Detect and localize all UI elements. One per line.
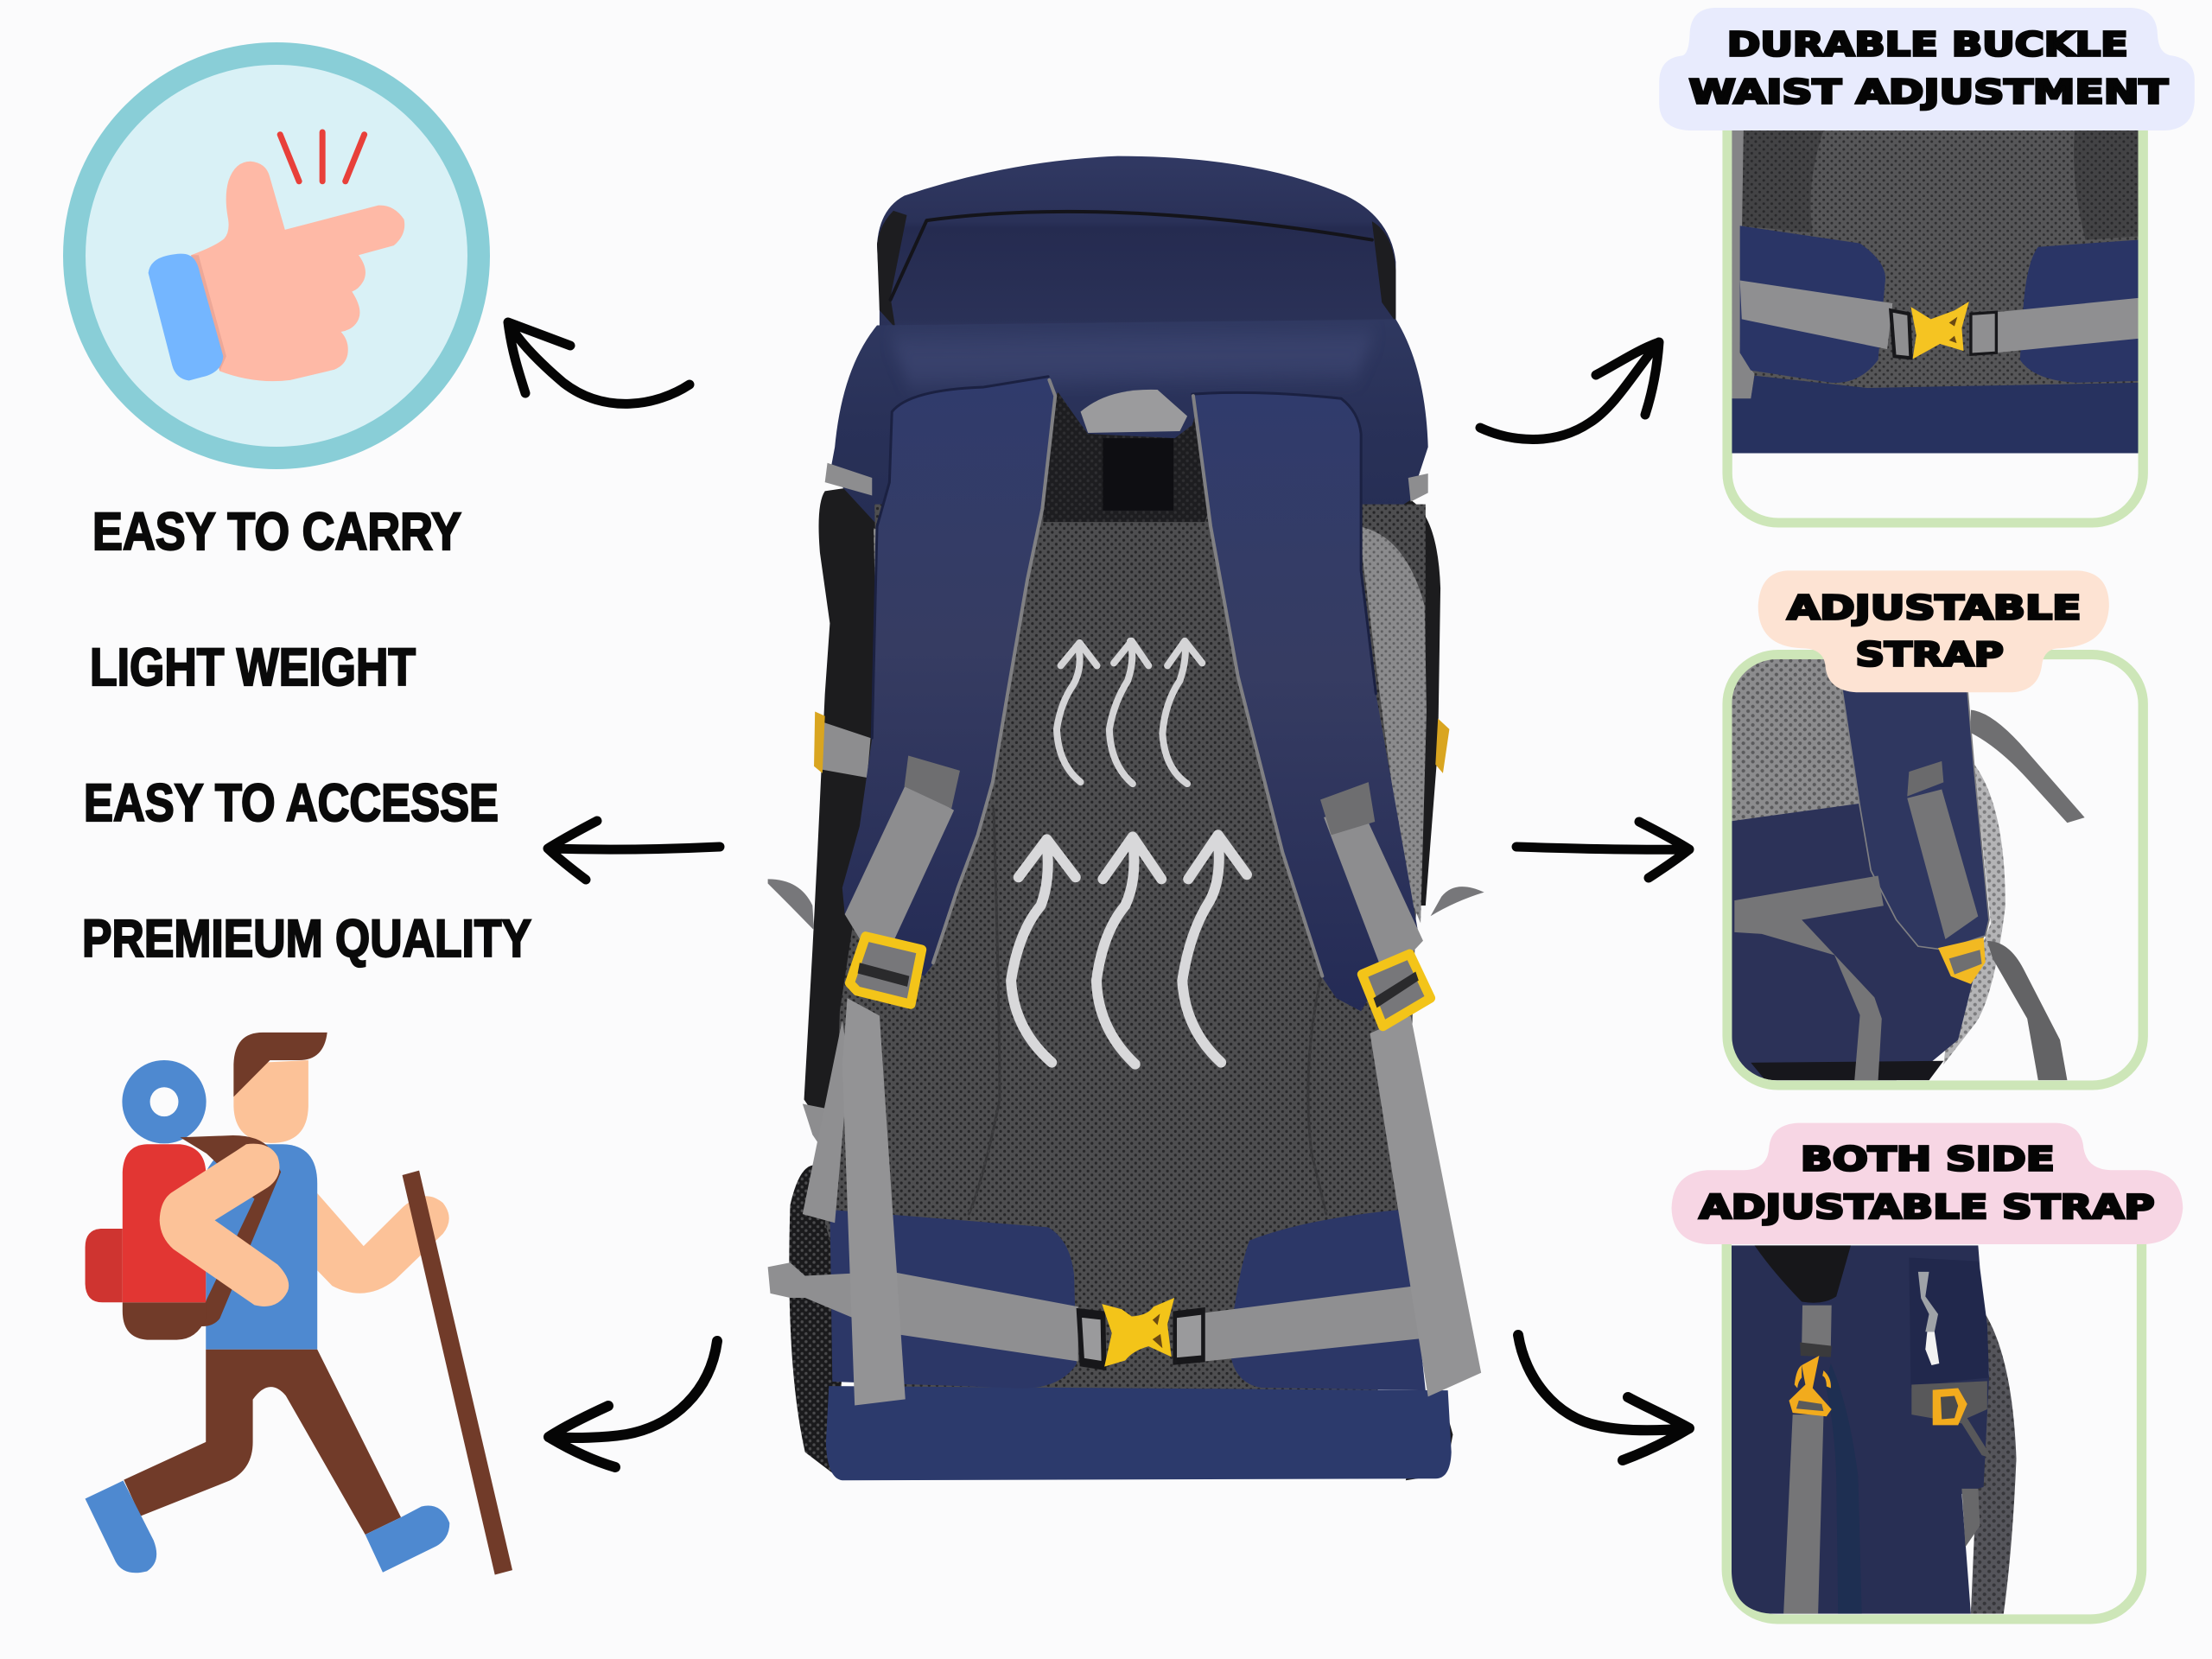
torso bbox=[206, 1144, 317, 1350]
top handle bbox=[1081, 390, 1187, 433]
right strap tab bbox=[1320, 782, 1375, 835]
label: easy to accesse: EASY TO ACCESSE bbox=[84, 773, 499, 832]
left vertical strap upper bbox=[845, 782, 954, 971]
handle loop bbox=[1103, 438, 1173, 511]
left buckle slider bbox=[1079, 1313, 1104, 1366]
right bottom corner bbox=[1406, 1399, 1452, 1480]
upper body bbox=[830, 319, 1428, 522]
left strap outer edge bbox=[872, 377, 1048, 738]
lid bbox=[877, 156, 1395, 328]
arrow: to hand icon bbox=[508, 322, 690, 404]
right vertical strap upper bbox=[1324, 809, 1423, 981]
label: premieum quality: PREMIEUM QUALITY bbox=[82, 909, 531, 968]
panel frame bbox=[1726, 1194, 2142, 1619]
icon: hiker with backpack bbox=[86, 1033, 512, 1574]
badge background bbox=[1672, 1123, 2183, 1244]
right strap piping bbox=[1193, 396, 1322, 976]
left black side bbox=[804, 482, 885, 1130]
left strap tab bbox=[905, 755, 960, 809]
right strap outer edge bbox=[1192, 392, 1376, 694]
right shoulder strap bbox=[1192, 392, 1418, 1011]
main backpack photo bbox=[768, 156, 1484, 1480]
icon: pointing hand in a circle bbox=[74, 54, 479, 458]
lighter fold on upper body bbox=[889, 333, 1376, 385]
arrow: to adjustable strap panel bbox=[1516, 822, 1689, 878]
badge background bbox=[1659, 8, 2195, 130]
icon circle bbox=[74, 54, 479, 458]
photo: front view strap bbox=[1732, 1245, 2017, 1614]
side wings bbox=[768, 879, 1484, 931]
bedroll bbox=[122, 1060, 207, 1143]
waist buckle bbox=[1102, 1298, 1174, 1367]
arrow: to hiker bbox=[549, 1341, 717, 1467]
hair bbox=[233, 1033, 327, 1096]
panel frame bbox=[1727, 71, 2143, 523]
label: light weight: LIGHT WEIGHT bbox=[90, 638, 416, 696]
back shoe bbox=[86, 1481, 156, 1573]
body bottom bbox=[826, 1386, 1452, 1480]
lumbar seams bbox=[969, 809, 1326, 1214]
bag pocket bbox=[86, 1229, 123, 1302]
photo: waist buckle closeup bbox=[1732, 130, 2139, 454]
near arm bbox=[160, 1144, 289, 1306]
badge text line 1: DURABLE BUCKLE bbox=[1727, 26, 2128, 64]
left shoulder strap bbox=[842, 377, 1057, 976]
panel: adjustable strap bbox=[1727, 570, 2143, 1085]
left waist strap bbox=[768, 1262, 1078, 1361]
badge text line 2: STRAP bbox=[1855, 636, 2004, 674]
airflow arrows top row bbox=[1057, 641, 1202, 784]
lid black edges bbox=[877, 211, 1395, 328]
right vertical strap lower bbox=[1370, 1016, 1481, 1396]
right light mesh bbox=[1358, 526, 1427, 923]
hand drawing bbox=[149, 132, 404, 381]
far arm bbox=[317, 1193, 449, 1294]
lid zip bbox=[891, 212, 1372, 300]
yellow side tabs bbox=[814, 711, 1449, 773]
right black side bbox=[1356, 500, 1440, 906]
arrow: to both side strap panel bbox=[1518, 1335, 1689, 1460]
panel: durable buckle bbox=[1659, 8, 2195, 523]
neck mesh bbox=[1043, 392, 1210, 522]
left hip pad bbox=[830, 1210, 1077, 1389]
head bbox=[233, 1060, 308, 1143]
left light mesh bbox=[874, 528, 892, 702]
lower left diagonal strap bbox=[803, 1020, 849, 1223]
badge background bbox=[1758, 570, 2109, 692]
bag body bbox=[123, 1144, 206, 1302]
left vertical strap lower bbox=[842, 998, 906, 1406]
badge text line 1: ADJUSTABLE bbox=[1787, 589, 2081, 627]
grey side loops bbox=[803, 463, 1428, 1157]
badge text line 2: ADJUSTABLE STRAP bbox=[1700, 1188, 2154, 1227]
left side pocket mesh bbox=[789, 1166, 845, 1478]
legs bbox=[124, 1350, 401, 1535]
bag straps bbox=[180, 1135, 281, 1326]
label: easy to carry: EASY TO CARRY bbox=[92, 502, 461, 561]
airflow arrows bottom row bbox=[1011, 835, 1247, 1065]
left yellow slider bbox=[849, 937, 922, 1004]
arrow: to buckle panel bbox=[1480, 342, 1659, 440]
bag base bbox=[123, 1302, 206, 1340]
right hip pad bbox=[1230, 1210, 1426, 1390]
feature list bbox=[82, 502, 531, 968]
arrow: to feature list bbox=[548, 821, 720, 880]
walking pole bbox=[403, 1171, 512, 1574]
photo: side view strap bbox=[1732, 659, 2085, 1080]
badge text line 2: WAIST ADJUSTMENT bbox=[1689, 73, 2169, 111]
right waist strap bbox=[1205, 1285, 1431, 1361]
badge text line 1: BOTH SIDE bbox=[1801, 1141, 2055, 1179]
panel: both side adjustable strap bbox=[1672, 1123, 2183, 1619]
front shoe bbox=[365, 1505, 449, 1573]
left strap piping bbox=[933, 380, 1055, 963]
back panel mesh bbox=[825, 505, 1426, 1401]
right yellow slider bbox=[1362, 954, 1431, 1027]
panel frame bbox=[1727, 655, 2143, 1085]
right buckle slider bbox=[1175, 1311, 1203, 1361]
